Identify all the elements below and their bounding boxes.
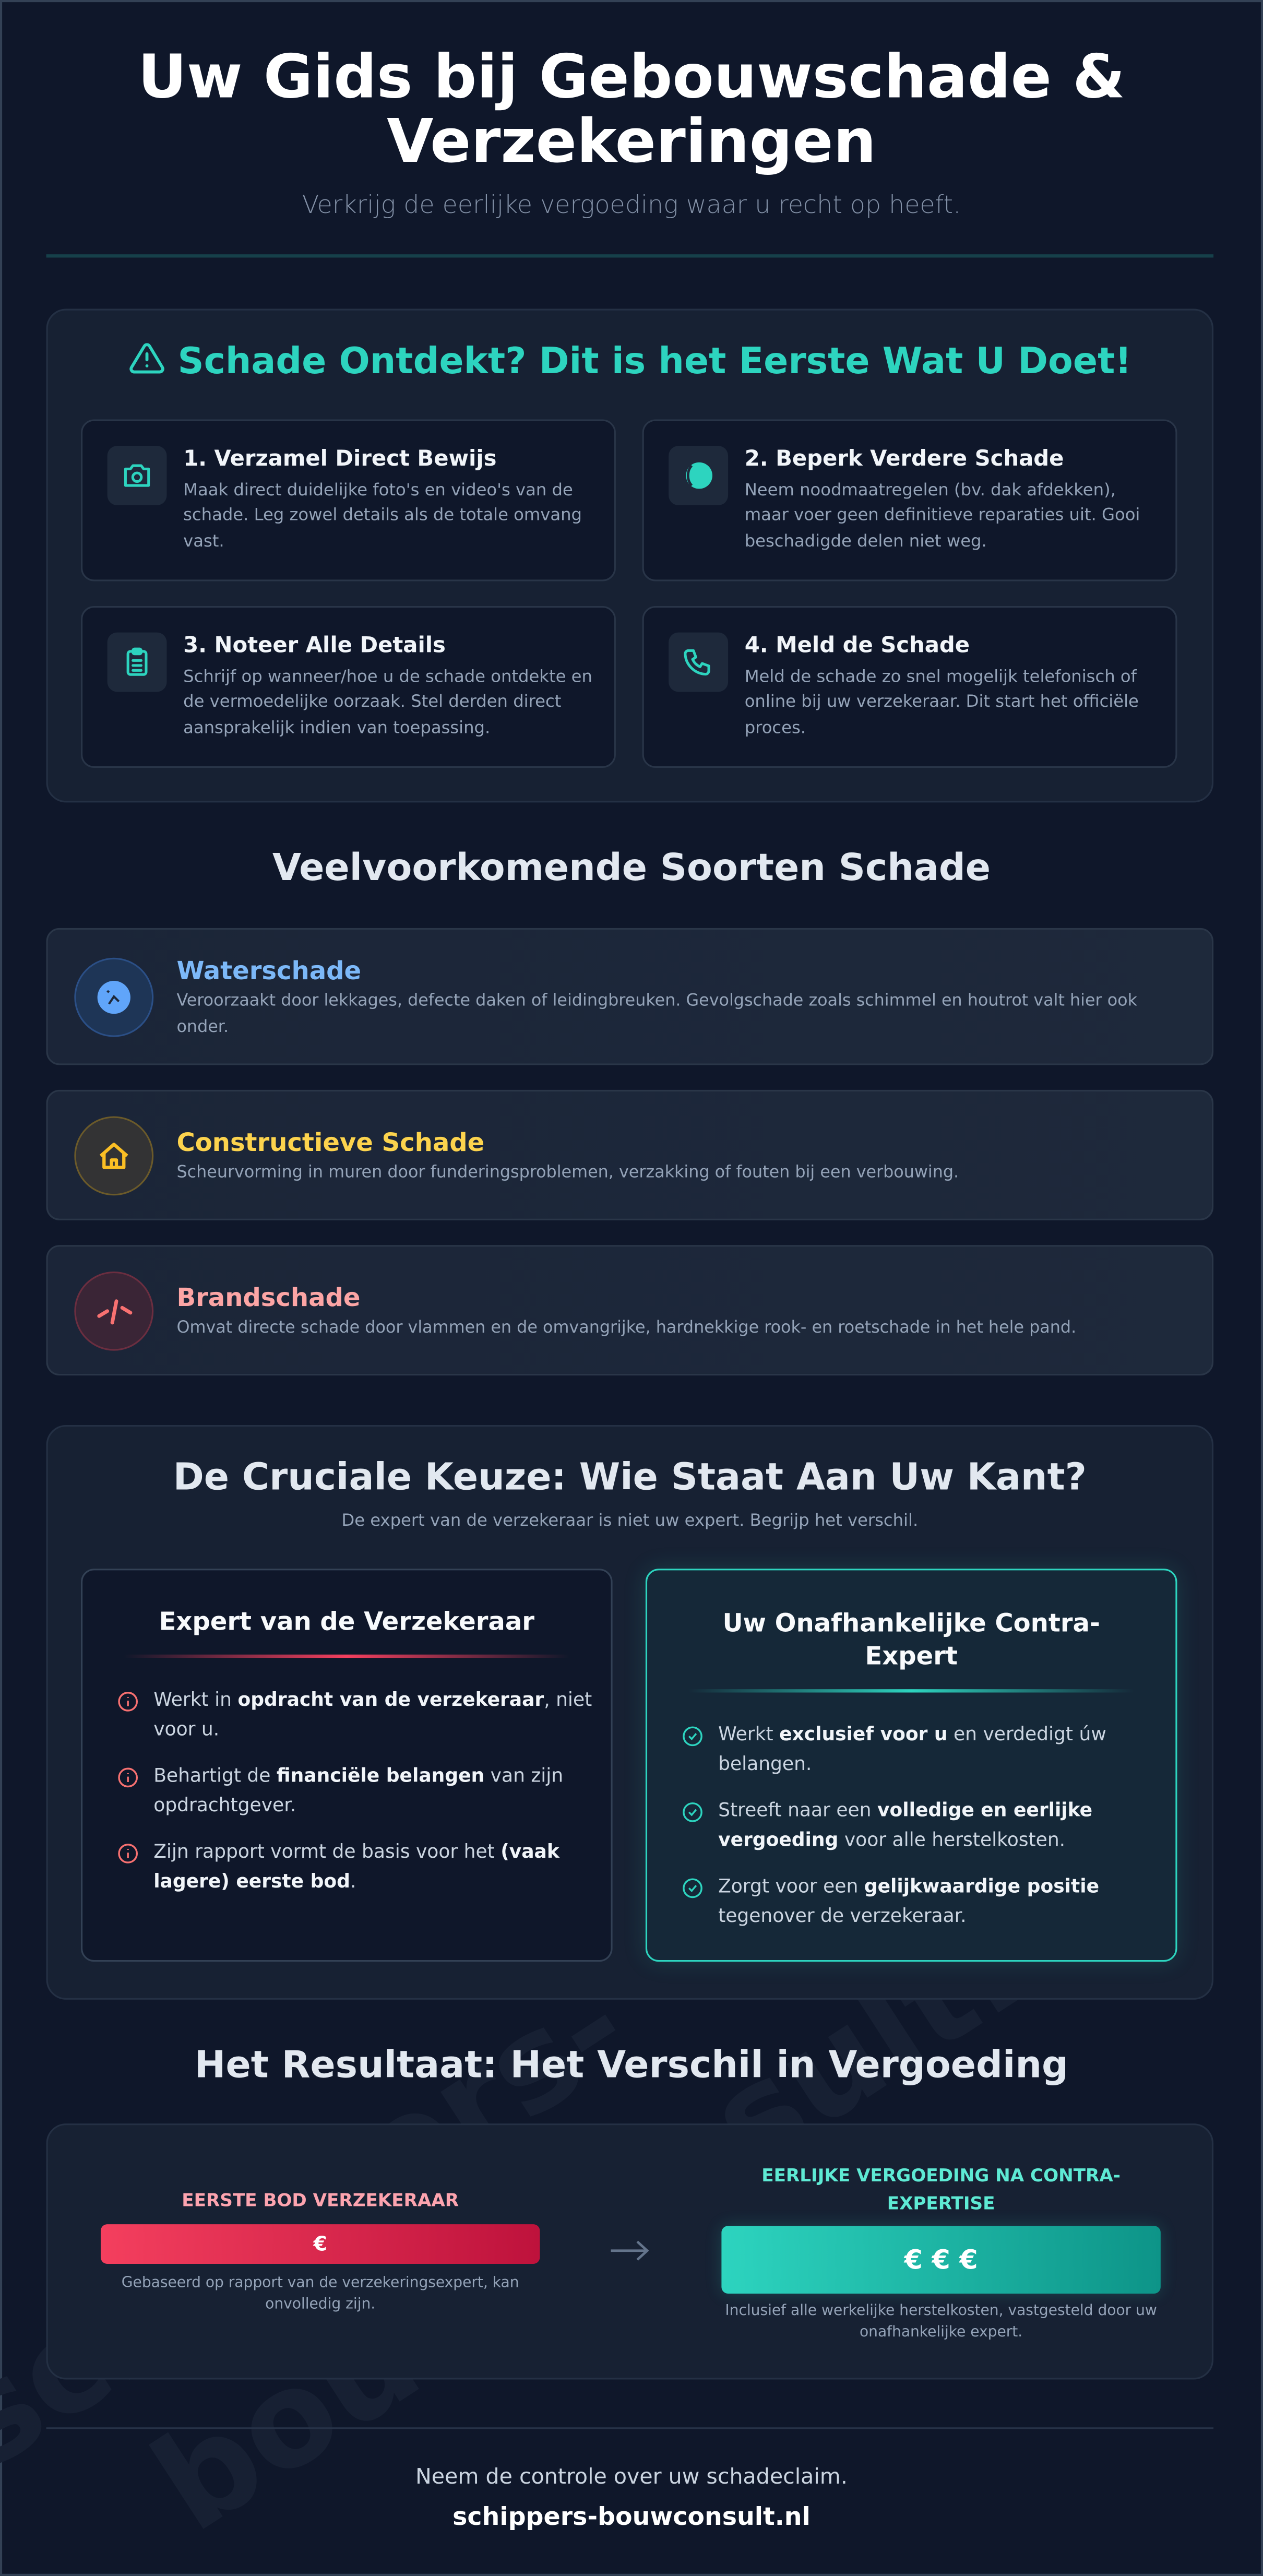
title [138, 41, 1125, 176]
card: step 2: 2. Beperk Verdere Schade [745, 447, 1064, 472]
card: brandschade: Omvat directe schade door vlammen en de omvangrijke, hardnekkige rook- en roetschade in het hele pand. [176, 1320, 1076, 1337]
icon: fire [74, 1272, 153, 1351]
card: constructieve schade: Scheurvorming in muren door funderingsproblemen, verzakking of fouten bij een verbouwing. [176, 1164, 959, 1182]
icon: house [74, 1116, 153, 1195]
card: step 2: Neem noodmaatregelen (bv. dak afdekken), maar voer geen definitieve reparaties uit. Gooi beschadigde delen niet weg. [745, 482, 1140, 551]
card: step 1: 1. Verzamel Direct Bewijs [183, 447, 496, 472]
card: step 1: Maak direct duidelijke foto's en video's van de schade. Leg zowel details als de totale omvang vast. [183, 482, 582, 551]
bar: first offer: € [313, 2233, 327, 2256]
label: first offer: EERSTE BOD VERZEKERAAR [182, 2190, 459, 2211]
heading: crucial choice: De Cruciale Keuze: Wie Staat Aan Uw Kant? [173, 1456, 1087, 1499]
bar: fair compensation: € € € [904, 2244, 978, 2275]
title: Verzekeringen [387, 105, 876, 176]
box: insurer expert: Behartigt de financiële belangen van zijn opdrachtgever. [153, 1764, 563, 1817]
panel: result [46, 2123, 1213, 2379]
card: step 3: Schrijf op wanneer/hoe u de schade ontdekte en de vermoedelijke oorzaak. Stel derden direct aansprakelijk indien van toepassing. [183, 669, 592, 738]
bar: fair compensation [721, 2226, 1161, 2294]
panel: first steps [46, 309, 1213, 802]
card: waterschade: Veroorzaakt door lekkages, defecte daken of leidingbreuken. Gevolgschade zoals schimmel en houtrot valt hier ook onder. [176, 992, 1137, 1036]
subtitle: Verkrijg de eerlijke vergoeding waar u recht op heeft. [302, 190, 961, 220]
icon: camera [108, 446, 167, 505]
card: constructieve schade: Constructieve Schade [176, 1128, 484, 1158]
panel: crucial choice [46, 1425, 1213, 2000]
label: fair compensation: EERLIJKE VERGOEDING NA CONTRA-EXPERTISE [761, 2165, 1121, 2214]
box: independent expert: Streeft naar een volledige en eerlijke vergoeding voor alle herstelkosten. [718, 1798, 1092, 1851]
card: step 4 [642, 606, 1177, 768]
heading: damage types: Veelvoorkomende Soorten Schade [272, 847, 991, 890]
card: constructieve schade [46, 1090, 1213, 1220]
card: step 4: Meld de schade zo snel mogelijk telefonisch of online bij uw verzekeraar. Dit start het officiële proces. [745, 669, 1139, 738]
title: Uw Gids bij Gebouwschade & [138, 41, 1125, 112]
card: step 3: 3. Noteer Alle Details [183, 634, 446, 659]
card: step 2 [642, 420, 1177, 581]
list: insurer expert: Werkt in opdracht van de verzekeraar, niet voor u. [153, 1688, 592, 1740]
heading: first steps: Schade Ontdekt? Dit is het Eerste Wat U Doet! [177, 342, 1131, 383]
box: insurer expert: Expert van de Verzekeraar [159, 1607, 534, 1636]
icon: shield [669, 446, 728, 505]
card: step 3 [81, 606, 616, 768]
card: waterschade: Waterschade [176, 956, 361, 986]
card: brandschade: Brandschade [176, 1283, 361, 1313]
box: independent expert [646, 1569, 1177, 1962]
arrow [611, 2240, 649, 2261]
watermark: bouwconsult.nl [127, 1814, 1163, 2561]
box: independent expert: Uw Onafhankelijke Contra-Expert [722, 1608, 1100, 1671]
subtitle: crucial choice: De expert van de verzekeraar is niet uw expert. Begrijp het verschil. [341, 1513, 918, 1530]
icon: water [74, 958, 153, 1037]
note: fair compensation: Inclusief alle werkelijke herstelkosten, vastgesteld door uw onafhankelijke expert. [725, 2304, 1157, 2341]
card: step 4: 4. Meld de Schade [745, 634, 970, 659]
note: first offer: Gebaseerd op rapport van de verzekeringsexpert, kan onvolledig zijn. [122, 2275, 519, 2312]
list: independent expert: Werkt exclusief voor u en verdedigt úw belangen. [718, 1722, 1106, 1775]
card: step 1 [81, 420, 616, 581]
bar: first offer [101, 2224, 540, 2264]
box: independent expert: Zorgt voor een gelijkwaardige positie tegenover de verzekeraar. [718, 1874, 1099, 1927]
card: waterschade [46, 928, 1213, 1065]
card: brandschade [46, 1245, 1213, 1375]
footer url: schippers-bouwconsult.nl [452, 2502, 811, 2531]
box: insurer expert: Zijn rapport vormt de basis voor het (vaak lagere) eerste bod. [153, 1839, 559, 1892]
footer text: Neem de controle over uw schadeclaim. [415, 2465, 848, 2490]
box: insurer expert [81, 1569, 613, 1962]
icon: clipboard [108, 633, 167, 692]
icon: phone [669, 633, 728, 692]
heading: result: Het Resultaat: Het Verschil in Vergoeding [195, 2044, 1068, 2087]
